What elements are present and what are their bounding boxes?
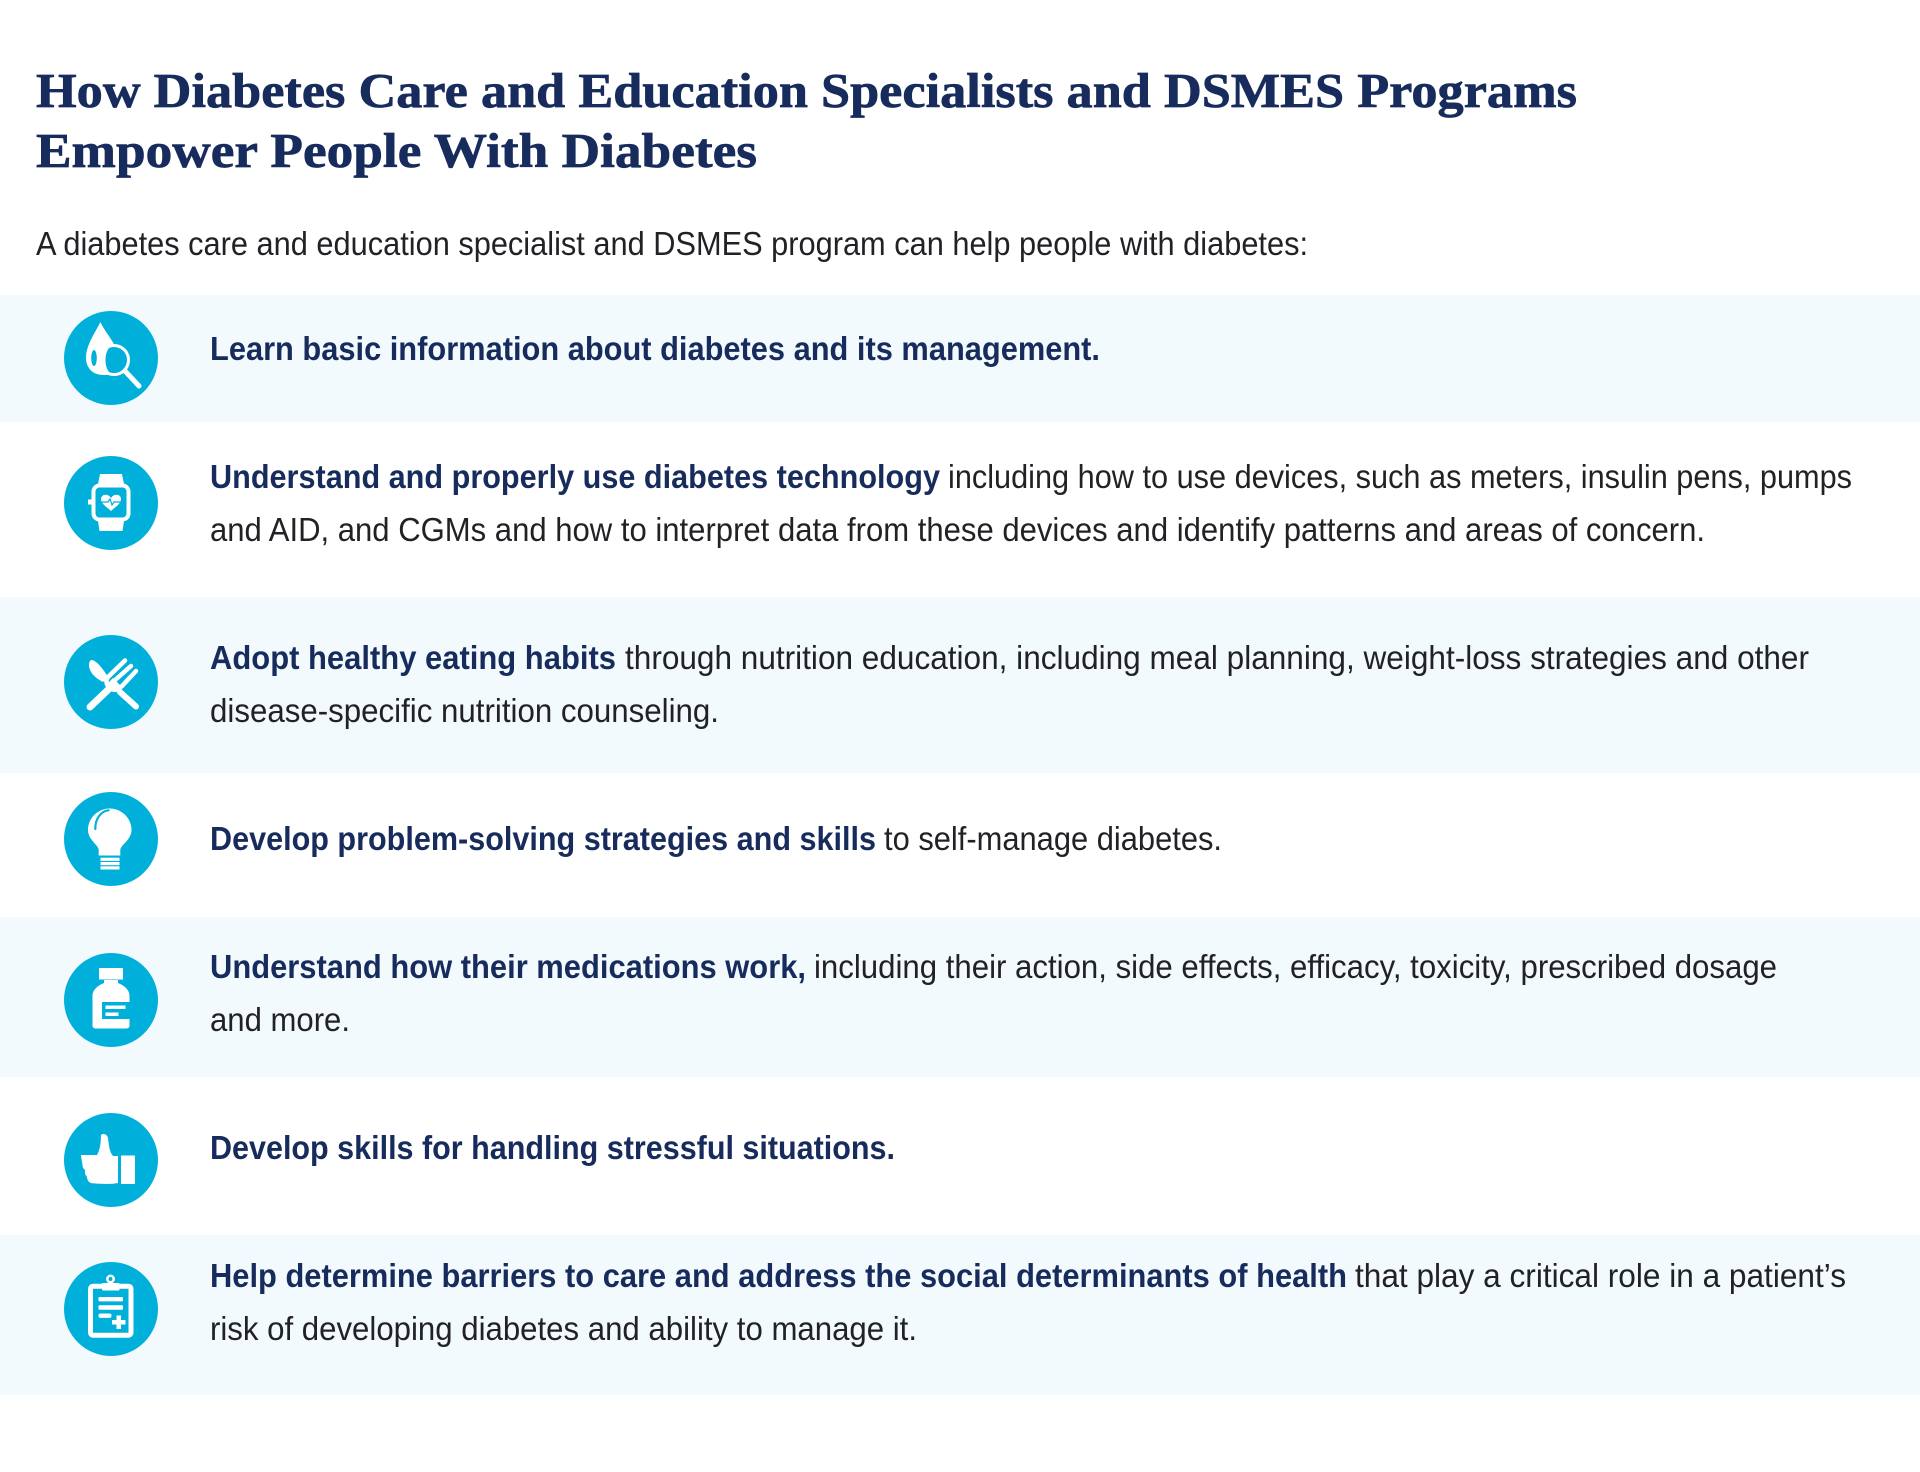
panel: medications: [0, 917, 1920, 1077]
band: [0, 773, 1920, 917]
band: [0, 295, 1920, 422]
icon: smart watch: [64, 456, 158, 550]
text: Develop skills for handling stressful situations.: [210, 1129, 895, 1166]
text: and AID, and CGMs and how to interpret data from these devices and identify patterns and areas of concern.: [210, 511, 1705, 548]
title: How Diabetes Care and Education Specialists and DSMES Programs: [36, 63, 1577, 118]
text: Adopt healthy eating habits: [210, 639, 616, 676]
band: [0, 1077, 1920, 1235]
text: [210, 1257, 1846, 1347]
text: Understand how their medications work,: [210, 948, 806, 985]
text: that play a critical role in a patient’s: [1355, 1257, 1846, 1294]
panel: problem solving: [0, 773, 1920, 917]
text: Help determine barriers to care and address the social determinants of health: [210, 1257, 1347, 1294]
text: and more.: [210, 1001, 350, 1038]
text: Develop problem-solving strategies and skills: [210, 820, 876, 857]
icon: light bulb: [64, 792, 158, 886]
band: [0, 597, 1920, 773]
panel: stressful situations: [0, 1077, 1920, 1235]
text: Understand and properly use diabetes technology: [210, 458, 941, 495]
icon: fork and knife: [64, 635, 158, 729]
text: disease-specific nutrition counseling.: [210, 692, 719, 729]
panel: diabetes technology: [0, 422, 1920, 597]
icon: drop and magnifier: [64, 311, 158, 405]
text: to self-manage diabetes.: [884, 820, 1222, 857]
text: including how to use devices, such as meters, insulin pens, pumps: [948, 458, 1852, 495]
text: Learn basic information about diabetes and its management.: [210, 330, 1100, 367]
intro text: A diabetes care and education specialist and DSMES program can help people with diabetes:: [36, 225, 1308, 262]
text: risk of developing diabetes and ability to manage it.: [210, 1310, 917, 1347]
text: [210, 639, 1809, 729]
icon: medicine bottle: [64, 953, 158, 1047]
text: through nutrition education, including meal planning, weight-loss strategies and other: [625, 639, 1809, 676]
title: Empower People With Diabetes: [36, 123, 757, 178]
text: including their action, side effects, efficacy, toxicity, prescribed dosage: [814, 948, 1777, 985]
text: [210, 948, 1777, 1038]
panel: healthy eating: [0, 597, 1920, 773]
icon: clipboard: [64, 1262, 158, 1356]
icon: thumbs up: [64, 1113, 158, 1207]
panel: learn basic information: [0, 295, 1920, 422]
band: [0, 917, 1920, 1077]
title: [36, 63, 1577, 178]
band: [0, 422, 1920, 597]
band: [0, 1235, 1920, 1395]
panel: barriers to care: [0, 1235, 1920, 1395]
text: [210, 458, 1852, 548]
